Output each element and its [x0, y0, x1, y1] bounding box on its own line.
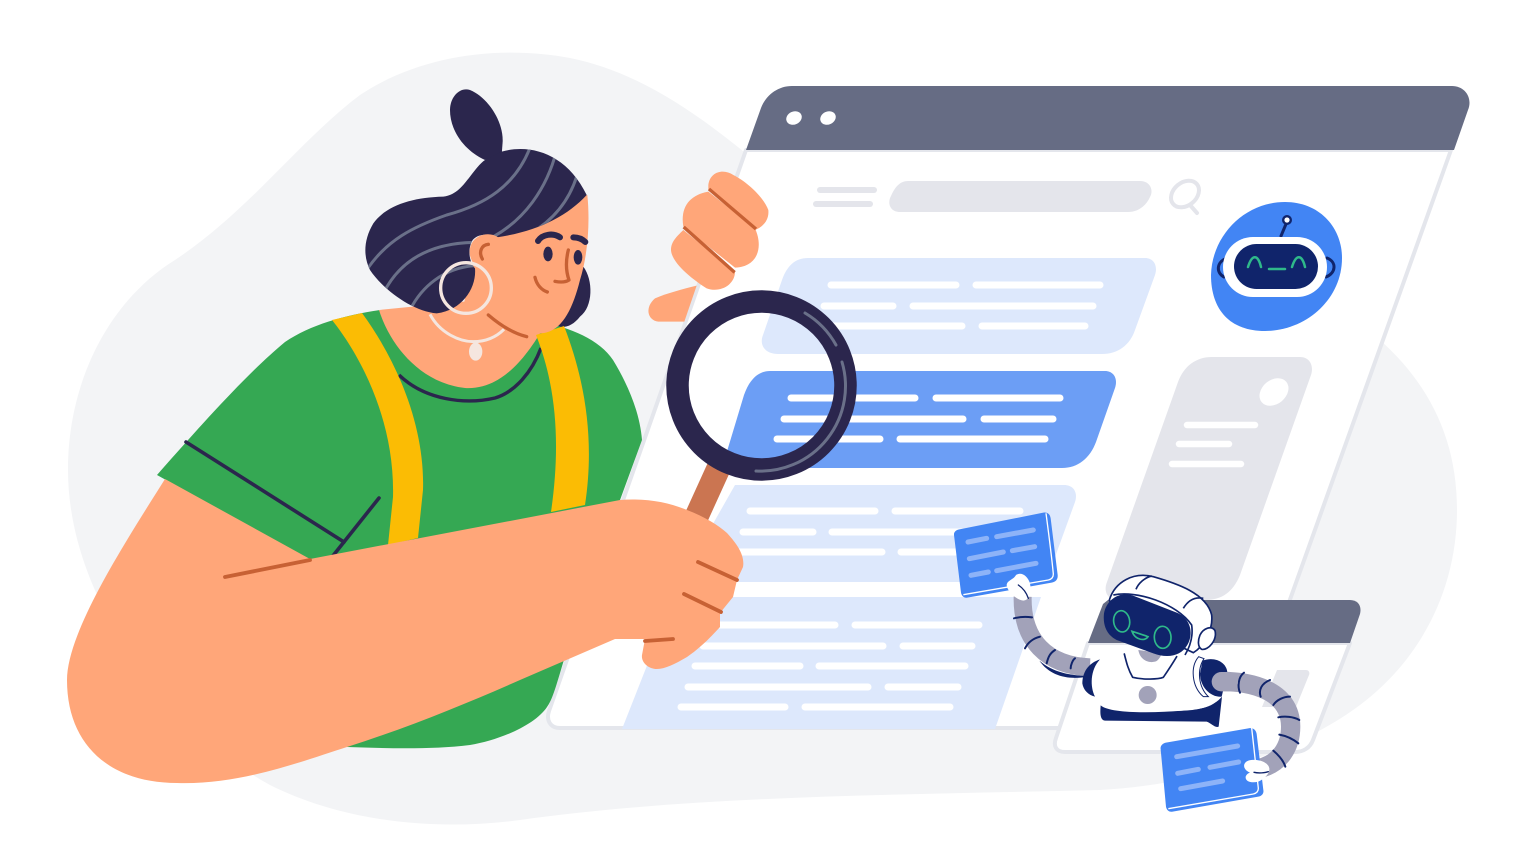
ear — [470, 234, 498, 268]
bubble 2 — [722, 371, 1116, 468]
magnifier handle — [695, 454, 725, 520]
raised hand — [648, 172, 768, 322]
neck skin — [379, 300, 545, 388]
bubble 4 — [622, 597, 1041, 729]
second browser window — [1055, 600, 1361, 752]
bun — [450, 89, 503, 160]
head — [365, 89, 589, 361]
window body — [548, 150, 1451, 728]
arm crease and finger lines — [225, 560, 737, 641]
card left — [954, 513, 1058, 601]
earring — [441, 263, 491, 313]
search icon — [1166, 175, 1204, 213]
chatbot avatar — [1211, 202, 1342, 331]
woman with magnifying glass — [67, 89, 846, 783]
card right — [1161, 728, 1269, 812]
robot body — [1082, 650, 1228, 727]
right arm — [1213, 673, 1299, 768]
browser window — [548, 86, 1470, 729]
eyes — [543, 247, 582, 265]
back hair — [557, 267, 590, 327]
hair — [365, 149, 587, 313]
robot head — [1104, 575, 1215, 656]
shirt sleeve lines — [186, 442, 379, 557]
necklace — [430, 314, 504, 342]
bubble 1 — [762, 258, 1156, 354]
hair strands — [367, 143, 579, 310]
eyebrows — [538, 235, 585, 242]
title bar — [746, 86, 1470, 150]
arm and hand — [67, 479, 743, 783]
search bar — [889, 181, 1152, 212]
green shirt — [157, 310, 642, 748]
nose, mouth, jaw — [488, 250, 569, 337]
robot — [954, 513, 1299, 812]
menu lines — [816, 190, 874, 204]
magnifier ring — [678, 302, 846, 471]
neckline — [399, 348, 541, 401]
window dots — [784, 109, 838, 127]
suspenders — [332, 313, 589, 545]
bubble 3 — [680, 485, 1076, 582]
grey bubble — [1106, 357, 1312, 600]
face — [463, 195, 589, 333]
left arm — [1014, 597, 1090, 678]
